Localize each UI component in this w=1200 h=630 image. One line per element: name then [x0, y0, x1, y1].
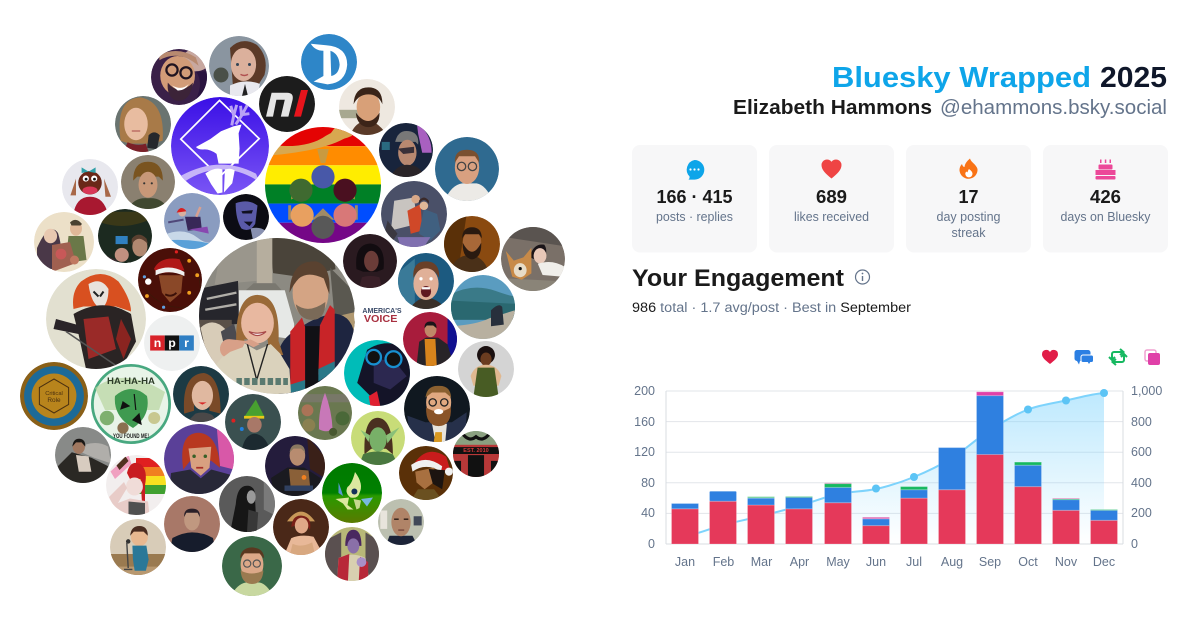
icon: chat bubble: [687, 160, 704, 180]
chart: right axis labels: [1131, 384, 1162, 551]
chart: left axis labels: 40: [641, 506, 655, 520]
stat card: posts and replies: 166 · 415: [656, 187, 732, 207]
avatar: red-haired warrior: [46, 269, 146, 369]
chart: month labels: Feb: [713, 555, 734, 569]
chart: left axis labels: [634, 384, 655, 551]
chart: right axis labels: 200: [1131, 506, 1152, 520]
chart: right axis labels: 400: [1131, 476, 1152, 490]
avatar: anime couple on couch: [381, 181, 447, 247]
avatar bubble cluster: [20, 34, 565, 596]
avatar: shouting man: [398, 253, 454, 309]
avatar: NPR logo: [144, 315, 200, 371]
avatar: Celebi pokemon: [322, 463, 382, 523]
chart: left axis labels: 0: [648, 537, 655, 551]
chart: left axis labels: 120: [634, 445, 655, 459]
avatar: green mask sticker: HA-HA-HA: [107, 376, 155, 387]
avatar: purple-skinned character: [325, 527, 379, 581]
chart: month labels: [675, 555, 1115, 569]
stat card: days on Bluesky: 426: [1090, 187, 1121, 207]
stat card: posts and replies: [632, 145, 757, 252]
user name and handle: [733, 97, 1167, 119]
avatar: man with glasses on blue: [435, 137, 499, 201]
stat card: likes: 689: [816, 187, 847, 207]
chart: month labels: Oct: [1018, 555, 1038, 569]
chart: monthly engagement: [634, 384, 1162, 569]
avatar: bearded man with glasses laughing: [404, 376, 470, 442]
avatar: Darth Vader with glasses: [344, 340, 410, 406]
avatar: pride illustration: [106, 455, 166, 515]
icon: cake: [1096, 160, 1116, 180]
avatar: eyepatch game character: [379, 123, 433, 177]
heading: Your Engagement: Your Engagement: [632, 265, 844, 292]
stat card: streak: 17: [958, 187, 978, 207]
chart: right axis labels: 0: [1131, 537, 1138, 551]
avatar: elf with santa hat and lights: [138, 248, 202, 312]
avatar: green mask sticker: YOU FOUND ME!: [113, 433, 149, 440]
stat card: likes: [769, 145, 894, 252]
chart: cumulative area: [685, 393, 1104, 544]
avatar: Critical Role emblem: [20, 362, 88, 430]
chart: month labels: Nov: [1055, 555, 1078, 569]
icon: legend reposts: [1109, 349, 1127, 365]
chart: month labels: May: [826, 555, 851, 569]
chart: month labels: Jun: [866, 555, 886, 569]
chart: stacked bars: [672, 392, 1118, 544]
chart: right axis labels: 1,000: [1131, 384, 1162, 398]
avatar: deer logo: [171, 97, 269, 195]
chart: right axis labels: 600: [1131, 445, 1152, 459]
avatar: mountain with dog: [451, 275, 515, 339]
avatar: muppet with red jacket: [62, 159, 118, 215]
avatar: man with glasses: [151, 49, 210, 105]
stat card: days on Bluesky: [1043, 145, 1168, 252]
avatar: Critical Role emblem: Critical: [45, 391, 63, 397]
chart: month labels: Sep: [979, 555, 1001, 569]
avatar: woman with red lipstick: [173, 366, 229, 422]
avatar: woman with blond wavy hair: [115, 96, 171, 152]
chart: month labels: Dec: [1093, 555, 1115, 569]
avatar: NPR logo: p: [168, 336, 176, 350]
avatar: woman with santa hat: [399, 446, 453, 500]
icon: legend quotes: [1145, 350, 1160, 365]
stat card: likes: likes received: [794, 210, 869, 224]
stat card: days on Bluesky: days on Bluesky: [1060, 210, 1151, 224]
chart: month labels: Jul: [906, 555, 922, 569]
stat card: posts and replies: posts · replies: [656, 210, 733, 224]
stat card: streak: streak: [952, 226, 986, 240]
avatar: nl logo: [259, 76, 315, 132]
avatar: dark comic man: [223, 194, 269, 240]
icon: legend heart: [1042, 350, 1058, 364]
avatar: green mask sticker: [91, 364, 171, 444]
avatar: main convention photo: [199, 238, 355, 394]
avatar: man with glasses on green: [222, 536, 282, 596]
chart: right axis labels: 800: [1131, 415, 1152, 429]
avatar: D logo: [301, 34, 357, 90]
avatar: woman with dark curly hair: [209, 36, 269, 96]
avatar: anime couple with flowers: [34, 212, 94, 272]
avatar: elf hat woman: [225, 394, 281, 450]
avatar: Commander Shepard illustration: [164, 424, 234, 494]
avatar: man in orange shirt on red: [403, 312, 457, 366]
engagement summary: 986 total · 1.7 avg/post · Best in September: [632, 300, 912, 315]
user name and handle: @ehammons.bsky.social: [940, 97, 1167, 119]
chart: month labels: Jan: [675, 555, 695, 569]
title: 2025: [1100, 62, 1167, 94]
avatar: man resting in dark jacket: [55, 427, 111, 483]
avatar: bearded man: [339, 79, 395, 135]
avatar: bearded warrior: [444, 216, 500, 272]
user name and handle: Elizabeth Hammons: [733, 97, 932, 119]
avatar: green elf illustration: [351, 411, 405, 465]
avatar: Critical Role emblem: Role: [47, 397, 61, 404]
avatar: America's Voice logo: [354, 295, 406, 322]
avatar: rainbow emblem: [265, 127, 381, 243]
avatar: woman in period costume: [121, 155, 175, 209]
avatar: man holding tablet: [265, 436, 325, 496]
icon: legend replies: [1074, 350, 1094, 365]
chart: cumulative line: [685, 389, 1108, 536]
avatar: bald man: [378, 499, 424, 545]
stat card: streak: [906, 145, 1031, 252]
avatar: Mandalorian emblem: EST. 2010: [463, 448, 489, 454]
avatar: America's Voice logo: AMERICA'S: [362, 306, 402, 315]
avatar: NPR logo: n: [154, 336, 161, 350]
avatar: dark-haired woman in shadow: [343, 234, 397, 288]
icon: heart: [821, 159, 842, 178]
avatar: woman with golden halo: [273, 499, 329, 555]
avatar: pixel podcaster: [110, 519, 166, 575]
avatar: America's Voice logo: VOICE: [364, 314, 398, 325]
avatar: NPR logo: r: [184, 336, 189, 350]
chart: left axis labels: 200: [634, 384, 655, 398]
chart legend icons: [1042, 349, 1160, 365]
chart: month labels: Mar: [751, 555, 772, 569]
icon: info: [856, 270, 870, 284]
avatar: flower garden: [298, 386, 352, 440]
avatar: woman with corgi: [501, 227, 565, 291]
chart: month labels: Apr: [790, 555, 809, 569]
avatar: bar selfie: [98, 209, 152, 263]
avatar: man in front of brick wall: [164, 496, 220, 552]
chart: left axis labels: 160: [634, 415, 655, 429]
title: Bluesky Wrapped: [832, 62, 1091, 94]
avatar: woman illustration in green dress: [458, 341, 514, 397]
chart: left axis labels: 80: [641, 476, 655, 490]
avatar: black and white profile: [219, 476, 275, 532]
stat card: streak: day posting: [936, 210, 1001, 224]
avatar: Mandalorian emblem: [453, 431, 499, 477]
avatar: skydiver: [164, 193, 220, 249]
chart: month labels: Aug: [941, 555, 963, 569]
icon: flame: [960, 158, 978, 179]
